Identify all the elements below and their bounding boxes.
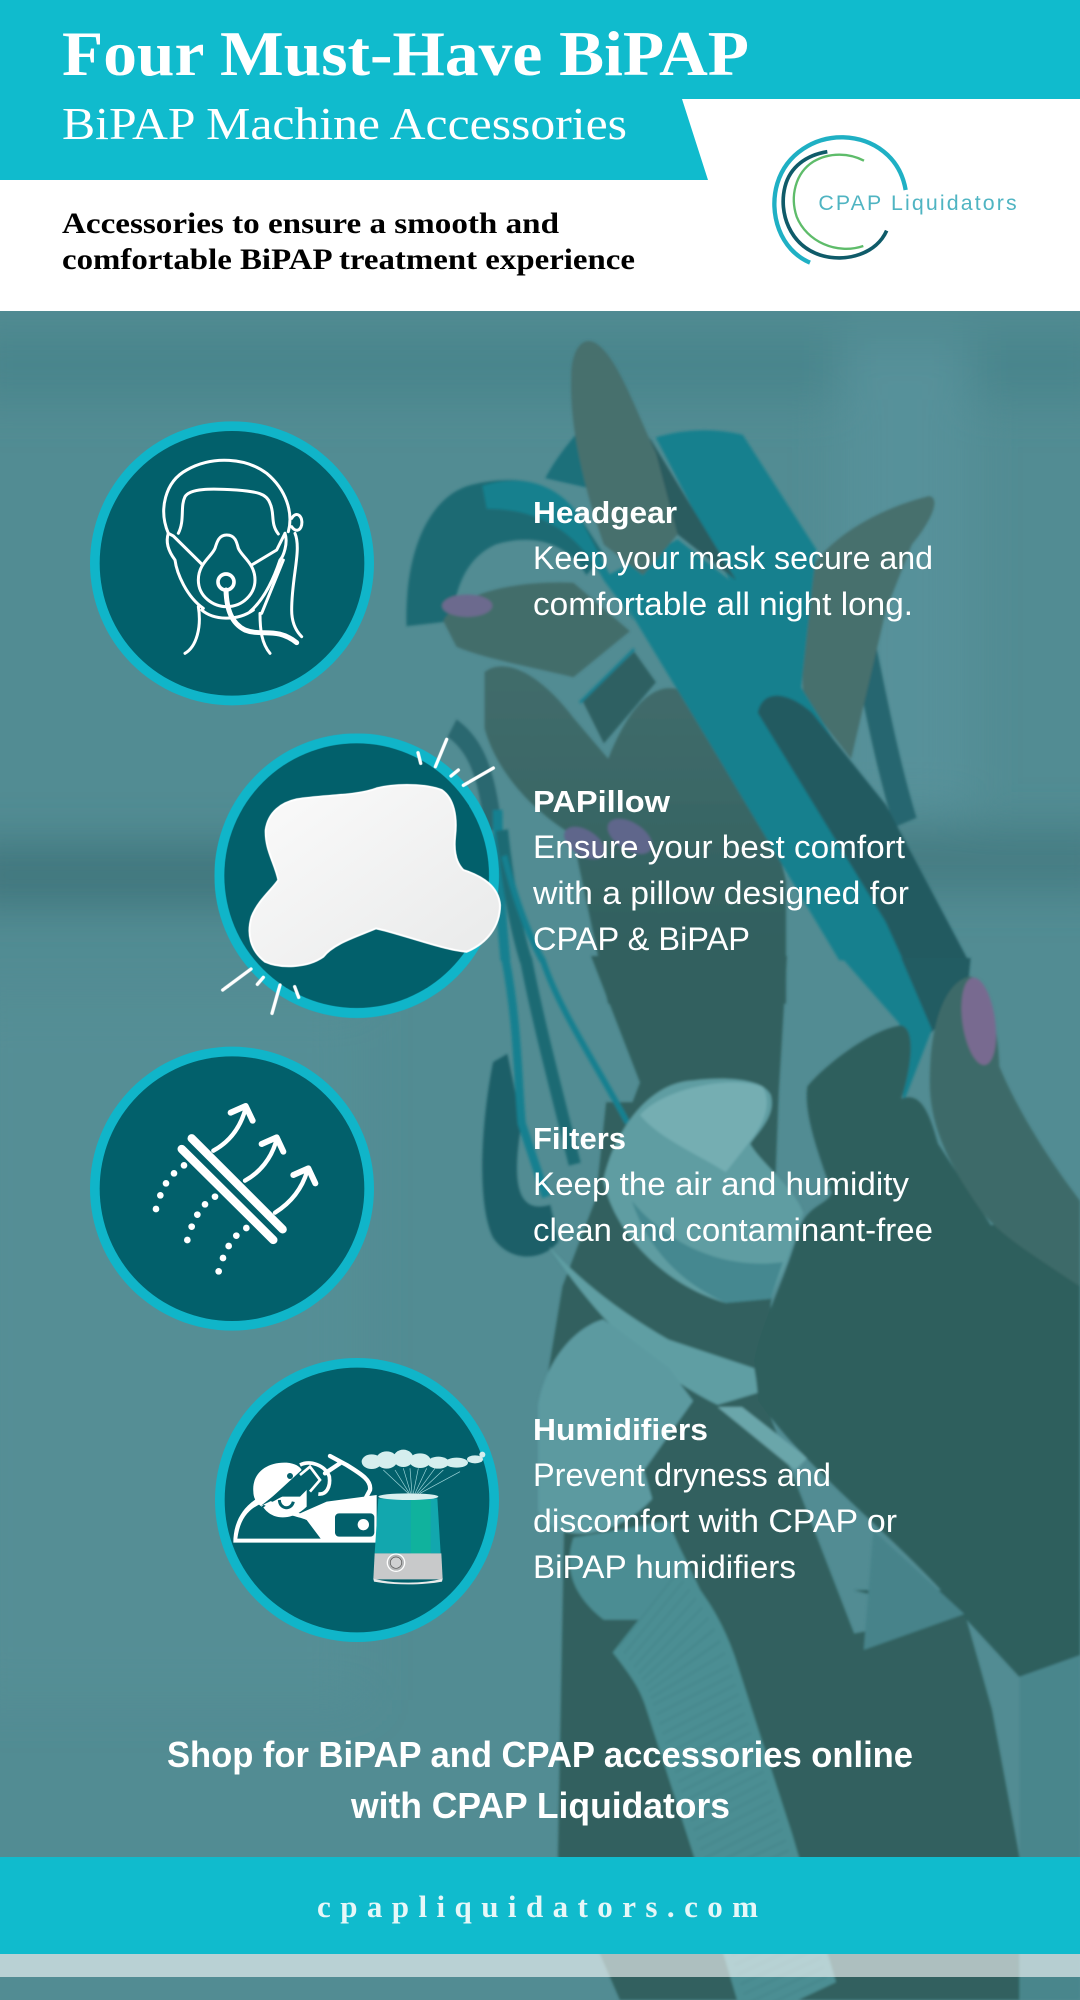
- item text: PAPillow: [532, 784, 909, 957]
- call to action: Shop for BiPAP and CPAP accessories online: [167, 1734, 913, 1775]
- item text: Headgear: comfortable all night long.: [533, 586, 913, 622]
- title: Four Must-Have BiPAP: [62, 18, 749, 89]
- call to action: with CPAP Liquidators: [350, 1785, 730, 1826]
- header background: [0, 0, 1080, 311]
- upper photo: ribbon straps and fingers: [406, 341, 968, 1004]
- breathing tube: [570, 1521, 790, 2000]
- lower photo: fist, straps and mask: [482, 956, 1080, 1600]
- item text: PAPillow: CPAP & BiPAP: [533, 921, 750, 957]
- item text: Humidifiers: [533, 1412, 897, 1585]
- item text: Humidifiers: BiPAP humidifiers: [533, 1549, 796, 1585]
- humidifier body: [373, 1493, 443, 1584]
- tagline: [62, 207, 635, 276]
- tagline: comfortable BiPAP treatment experience: [62, 243, 635, 276]
- item text: Humidifiers: Prevent dryness and: [533, 1457, 831, 1493]
- mask cushion: [603, 1079, 803, 1303]
- forearm and body: [558, 1102, 1019, 2000]
- tail of ribbon: [901, 958, 971, 1033]
- item text: PAPillow: Ensure your best comfort: [533, 829, 905, 865]
- call to action: [167, 1734, 913, 1826]
- header band: [0, 0, 1080, 180]
- logo: CPAP Liquidators: CPAP Liquidators: [818, 191, 1017, 215]
- sleeping person with machine: [233, 1456, 377, 1543]
- item text: PAPillow: PAPillow: [533, 784, 671, 819]
- icon: headgear: [90, 421, 374, 705]
- item text: Headgear: [533, 495, 933, 622]
- icon: PAPillow: [214, 733, 500, 1018]
- mist: [362, 1450, 485, 1493]
- wrist, light gap below the fist and right margin: [854, 1531, 1080, 2000]
- icon: humidifier: [215, 1358, 499, 1642]
- subtitle: BiPAP Machine Accessories: [62, 98, 627, 149]
- tagline: Accessories to ensure a smooth and: [62, 207, 559, 240]
- footer band: [0, 1857, 1080, 1954]
- item text: Filters: Keep the air and humidity: [533, 1166, 909, 1202]
- fist and thumb: [754, 1025, 1080, 1600]
- logo: CPAP Liquidators: [774, 137, 1017, 263]
- item text: PAPillow: with a pillow designed for: [532, 875, 909, 911]
- item text: Filters: clean and contaminant-free: [533, 1212, 933, 1248]
- icon: filter: [90, 1047, 374, 1331]
- item text: Filters: Filters: [533, 1121, 626, 1156]
- footer url: cpapliquidators.com: [317, 1889, 758, 1924]
- item text: Headgear: Headgear: [533, 495, 677, 530]
- item text: Humidifiers: Humidifiers: [533, 1412, 708, 1447]
- mask frame: [548, 1246, 758, 1405]
- item text: Headgear: Keep your mask secure and: [533, 540, 933, 576]
- light footer strip: [0, 1954, 1080, 1977]
- item text: Filters: [533, 1121, 933, 1248]
- item text: Humidifiers: discomfort with CPAP or: [533, 1503, 897, 1539]
- elbow joint: [538, 1319, 693, 1534]
